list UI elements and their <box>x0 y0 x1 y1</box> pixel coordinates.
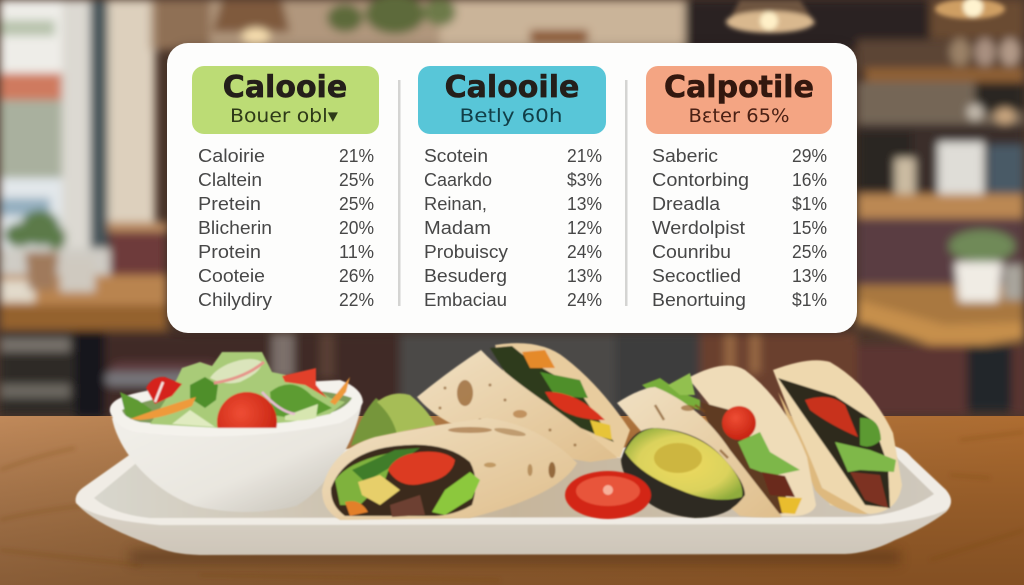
column 1 rows: Caloirie <box>198 146 265 166</box>
column 1 rows: 20% <box>339 218 374 238</box>
column 2 rows: Scotein <box>424 146 488 166</box>
column 2 rows: 24% <box>567 290 602 310</box>
column 1 rows: Pretein <box>198 194 261 214</box>
column 2 header <box>418 66 606 134</box>
taco right <box>773 360 902 514</box>
column 3 rows <box>652 146 827 310</box>
column 1 rows: 11% <box>339 242 374 262</box>
column 2 rows: $3% <box>567 170 602 190</box>
column 1 rows: Claltein <box>198 170 262 190</box>
column 2 header: Betly 60h <box>460 105 562 127</box>
tacos <box>565 360 902 519</box>
avocado half <box>621 428 745 518</box>
column 1 rows: Blicherin <box>198 218 272 238</box>
column 1 rows: Protein <box>198 242 261 262</box>
back wrap <box>417 343 630 462</box>
column 3 header: Calpotile <box>664 70 814 105</box>
column 2 rows: 24% <box>567 242 602 262</box>
column 2 rows: Embaciau <box>424 290 507 310</box>
taco left <box>617 387 782 517</box>
column 1 rows <box>198 146 374 310</box>
column 1 rows: 25% <box>339 194 374 214</box>
column 1 header: Bouer obl▾ <box>230 105 338 127</box>
column 3 rows: 16% <box>792 170 827 190</box>
column 3 header: Bεter 65% <box>688 105 790 127</box>
salad bowl <box>110 352 436 512</box>
column 1 rows: 26% <box>339 266 374 286</box>
column 3 rows: 29% <box>792 146 827 166</box>
column 2 rows: 13% <box>567 266 602 286</box>
column 1 rows: 22% <box>339 290 374 310</box>
column 3 rows: Contorbing <box>652 170 749 190</box>
column 2 rows: Caarkdo <box>424 170 492 190</box>
column 1 rows: Chilydiry <box>198 290 272 310</box>
column 3 rows: 13% <box>792 266 827 286</box>
column 3 rows: $1% <box>792 194 827 214</box>
column 1 rows: Cooteie <box>198 266 265 286</box>
avocado wedges <box>351 394 436 446</box>
column 2 rows: 13% <box>567 194 602 214</box>
column 1 header <box>192 66 379 134</box>
column 2 rows <box>424 146 602 310</box>
column 3 rows: Secoctlied <box>652 266 741 286</box>
column 3 rows: Dreadla <box>652 194 721 214</box>
column 3 rows: 15% <box>792 218 827 238</box>
column 3 rows: Benortuing <box>652 290 746 310</box>
taco middle <box>642 366 816 516</box>
column 3 rows: Counribu <box>652 242 731 262</box>
front wrap <box>322 418 577 520</box>
column 1 rows: 25% <box>339 170 374 190</box>
column 3 rows: $1% <box>792 290 827 310</box>
column 3 rows: 25% <box>792 242 827 262</box>
column 1 header: Calooie <box>223 70 347 105</box>
column 2 <box>418 66 606 310</box>
column 2 rows: Probuiscy <box>424 242 508 262</box>
column 2 rows: Besuderg <box>424 266 507 286</box>
column 3 rows: Saberic <box>652 146 718 166</box>
column 1 rows: 21% <box>339 146 374 166</box>
column 2 rows: 12% <box>567 218 602 238</box>
column 2 rows: Reinan, <box>424 194 487 214</box>
column 3 rows: Werdolpist <box>652 218 745 238</box>
nutrition panel <box>167 43 857 333</box>
column 3 <box>646 66 832 310</box>
salad greens <box>120 351 351 429</box>
wooden table <box>0 416 1024 585</box>
column 3 header <box>646 66 832 134</box>
tomato half <box>565 471 651 519</box>
column 1 <box>192 66 379 310</box>
column 2 rows: Madam <box>424 218 491 238</box>
serving plate <box>76 446 951 555</box>
column 2 header: Calooile <box>445 70 579 105</box>
column 2 rows: 21% <box>567 146 602 166</box>
